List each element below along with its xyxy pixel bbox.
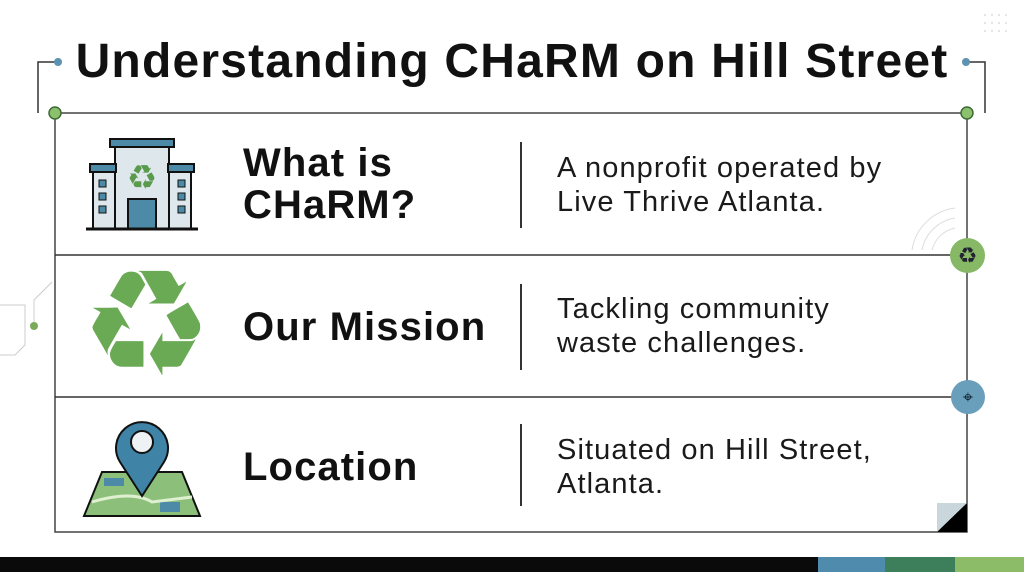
title: Understanding CHaRM on Hill Street xyxy=(76,35,948,88)
icon: green recycle badge: ♻ xyxy=(958,243,977,268)
description xyxy=(557,152,882,218)
footer bar xyxy=(0,557,1024,572)
heading xyxy=(243,141,416,227)
heading: Our Mission xyxy=(243,305,486,349)
description xyxy=(557,434,872,500)
icon: blue location badge: ⌖ xyxy=(963,387,973,407)
heading: Location xyxy=(243,445,418,489)
icon: building: ♻ xyxy=(127,159,157,197)
icon: building xyxy=(86,138,198,230)
icon: map pin xyxy=(82,421,202,517)
description xyxy=(557,293,830,359)
icon: recycle: ♻ xyxy=(80,238,213,410)
icon: green recycle badge xyxy=(950,238,985,273)
description: Atlanta. xyxy=(557,468,664,500)
row 2: mission xyxy=(80,238,830,410)
icon: blue location badge xyxy=(951,380,985,414)
heading: What is xyxy=(243,141,393,185)
heading: CHaRM? xyxy=(243,183,416,227)
description: A nonprofit operated by xyxy=(557,152,882,184)
description: Live Thrive Atlanta. xyxy=(557,186,825,218)
row 1: what is CHaRM xyxy=(86,138,882,230)
description: waste challenges. xyxy=(557,327,806,359)
description: Situated on Hill Street, xyxy=(557,434,872,466)
row 3: location xyxy=(82,421,872,517)
description: Tackling community xyxy=(557,293,830,325)
